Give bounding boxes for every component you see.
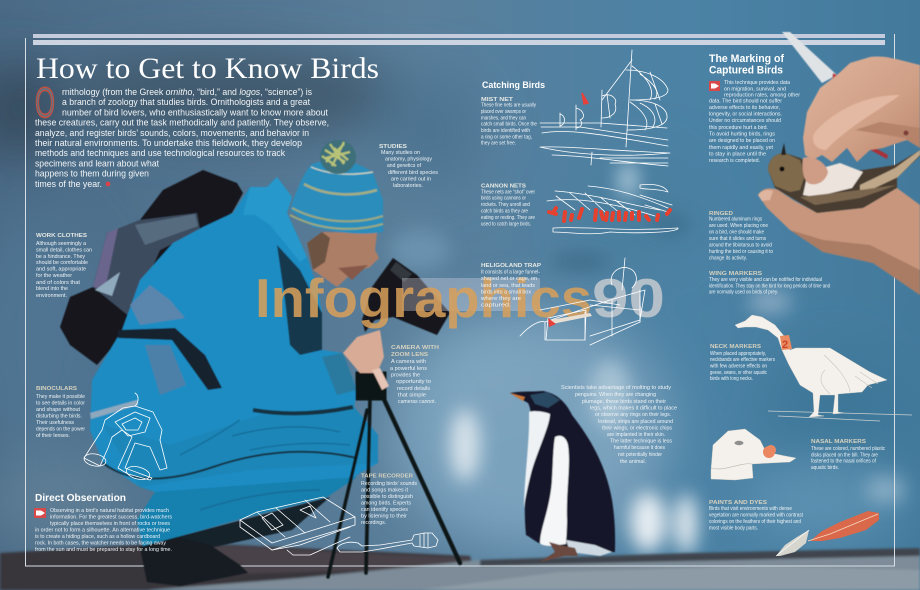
text: penguin note: not potentially hinder	[618, 452, 662, 458]
text: studies: different bird species	[388, 170, 439, 176]
text: mist net: they are set free.	[481, 140, 516, 146]
icon: cannon net sketch	[547, 184, 678, 234]
text: binoculars: depends on the power	[36, 426, 85, 432]
text: studies: Many studies on	[381, 150, 420, 156]
text: marking body: To avoid hurting birds, rings	[709, 132, 776, 138]
text: direct observation body: information. For the greatest success, bird-watchers	[50, 514, 173, 520]
intro text block	[35, 79, 329, 190]
text: tape recorder: possible to distinguish	[361, 494, 413, 500]
text: tape recorder: by listening to their	[361, 514, 407, 520]
icon: mist net sketch	[540, 50, 670, 166]
text: marking body: on migration, survival, and	[724, 86, 786, 92]
top double bar	[33, 34, 885, 45]
icon: painted feathers	[776, 511, 879, 556]
text: binoculars: They make it possible	[36, 394, 85, 400]
text: binoculars	[36, 386, 85, 439]
text: tape recorder	[361, 474, 418, 526]
text: neck markers	[710, 344, 775, 382]
text: work clothes: and soft, appropriate	[36, 266, 86, 272]
photo: penguin	[510, 391, 615, 562]
photo: hands holding bird	[758, 32, 920, 295]
text: camera with zoom lens	[390, 345, 439, 405]
text: wing markers: They are very visible and can be notified for individual	[709, 277, 822, 283]
text: binoculars: and shape without	[36, 407, 81, 413]
text: paints and dyes: Birds that visit environments with dense	[709, 506, 792, 512]
text: penguin note: The latter technique is less	[610, 438, 673, 444]
text: penguin note: Instead, strips are placed around	[598, 419, 673, 425]
panel: direct observation: Direct Observation	[35, 493, 126, 504]
text: ringed: sure that it slides and turns	[709, 236, 766, 242]
text: paints and dyes: vegetation are normally marked with contrast	[709, 512, 804, 518]
watermark: 90	[592, 267, 665, 329]
icon: heligoland trap sketch	[520, 258, 645, 345]
tripod	[328, 372, 460, 577]
text: camera with zoom lens: cameras cannot.	[398, 399, 436, 405]
text: cannon nets: birds using cannons or	[481, 196, 526, 202]
icon: tape recorder sketch	[240, 497, 355, 555]
text: marking body: research is completed.	[709, 158, 760, 164]
text: cannon nets: These nets are “shot” over	[481, 190, 535, 196]
text: binoculars: Their usefulness	[36, 420, 75, 426]
intro text block: analyze, and register birds’ sounds, colors, movements, and behavior in	[35, 128, 309, 139]
text: nasal markers: These are colored, numbered plastic	[811, 446, 885, 452]
pliers	[782, 32, 888, 159]
bird	[768, 143, 920, 213]
text: paints and dyes	[709, 500, 804, 532]
text: cannon nets	[481, 184, 535, 228]
text: penguin note: their wings, or electronic chips	[602, 426, 673, 432]
text: mist net: These fine nets are usually	[481, 103, 536, 109]
text: neck markers: NECK MARKERS	[710, 344, 761, 350]
text: neck markers: birds with long necks.	[710, 376, 753, 382]
text: studies: anatomy, physiology	[385, 156, 433, 162]
icon: arrow badge	[34, 508, 46, 518]
backpack	[60, 170, 243, 365]
text: marking body: are designed to be placed on	[709, 138, 775, 144]
text: direct observation body: rock. In both cases, the watcher needs to be facing away	[35, 540, 167, 546]
text: mist net	[481, 97, 537, 146]
text: ringed: Numbered aluminum rings	[709, 216, 762, 222]
text: penguin note: penguins. When they are changing	[575, 392, 656, 398]
panel: marking of captured birds	[709, 53, 784, 91]
text: ringed: are used. When placing one	[709, 223, 768, 229]
text: paints and dyes: most visible body parts.	[709, 526, 758, 532]
text: tape recorder: and songs makes it	[361, 488, 409, 494]
text: work clothes: environment.	[36, 293, 67, 299]
intro text block: number of bird lovers, who enthusiastically want to know more about	[62, 108, 328, 118]
text: paints and dyes: PAINTS AND DYES	[709, 500, 767, 506]
text: work clothes: small detail, clothes can	[36, 248, 92, 254]
text: penguin note: harmful because it does	[614, 445, 665, 451]
text: heligoland trap: captured.	[481, 302, 511, 308]
text: studies: and genetics of	[387, 163, 422, 169]
watermark: Infographics	[255, 267, 592, 329]
intro text block: rnithology (from the Greek ornitho, “bird,” and logos, “science”) is	[62, 87, 312, 98]
text: ringed	[709, 211, 773, 262]
text: cannon nets: used to catch large birds.	[481, 222, 531, 228]
intro text block: times of the year.	[35, 179, 102, 190]
intro text block: happens to them during given	[35, 168, 149, 180]
text: marking body: adverse effects to its behavior,	[709, 105, 780, 111]
text: work clothes: for the weather	[36, 273, 72, 279]
text: camera with zoom lens: provides the	[391, 372, 420, 378]
text: work clothes: WORK CLOTHES	[36, 233, 87, 239]
text: marking body: This technique provides data	[724, 80, 790, 86]
icon: goose with neck marker: 2	[782, 339, 788, 351]
text: wing markers: identification. They stay on the bird for long periods of time and	[709, 284, 830, 290]
intro text block: methods and techniques and use technological resources to track	[35, 148, 285, 159]
icon: microphone sketch	[337, 533, 438, 552]
intro text block: a branch of zoology that studies birds. Ornithologists and a great	[62, 97, 310, 108]
text: studies: STUDIES	[379, 144, 407, 150]
text: heligoland trap: birds into a small box	[481, 290, 532, 296]
text: nasal markers	[811, 439, 885, 471]
title: How to Get to Know Birds	[36, 52, 379, 85]
text: penguin note: are implanted in their skin.	[607, 432, 665, 438]
text: penguin note: plumage, these birds stand on their	[582, 399, 666, 405]
icon: duck head with nasal marker	[711, 429, 796, 480]
text: direct observation body: is to create a hiding place, such as a hollow cardboard	[35, 534, 160, 540]
panel: marking of captured birds: Captured Birds	[709, 64, 783, 76]
text: binoculars: BINOCULARS	[36, 386, 77, 392]
icon: binoculars sketch	[83, 393, 167, 482]
text: heligoland trap: where they are	[481, 296, 521, 302]
text: mist net: catch small birds. Once the	[481, 122, 537, 128]
text: neck markers: neckbands are effective markers	[710, 357, 775, 363]
text: binoculars: to see details in color	[36, 400, 85, 406]
intro text block: specimens and learn about what	[35, 158, 159, 170]
text: neck markers: with few adverse effects on	[710, 364, 767, 370]
text: marking body: data. The bird should not suffer	[709, 98, 782, 104]
text: wing markers: WING MARKERS	[709, 271, 762, 277]
text: marking body: longevity, or social interactions.	[709, 112, 782, 118]
jacket and trousers	[90, 177, 378, 548]
text: mist net: birds are identified with	[481, 128, 530, 134]
text: work clothes: blend into the	[36, 286, 68, 292]
text: work clothes: be a hindrance. They	[36, 254, 86, 260]
ground	[0, 544, 920, 590]
text: binoculars: of their lenses.	[36, 433, 70, 439]
panel: direct observation	[34, 493, 126, 518]
text: penguin note: or observe any rings on their legs.	[595, 412, 671, 418]
text: marking body: reproduction rates, among other	[724, 92, 800, 98]
text: marking body: Under no circumstances should	[709, 118, 781, 124]
text: work clothes	[36, 233, 92, 299]
text: ringed: around the tibiotarsus to avoid	[709, 242, 772, 248]
text: work clothes: and of colors that	[36, 280, 81, 286]
text: tape recorder: among birds. Experts	[361, 500, 412, 506]
heading: catching birds: Catching Birds	[482, 80, 545, 90]
intro text block: O	[35, 79, 55, 127]
text: penguin note: legs, which makes it difficult to place	[590, 406, 677, 412]
text: heligoland trap	[481, 263, 541, 308]
text: heligoland trap: HELIGOLAND TRAP	[481, 263, 541, 269]
text: camera with zoom lens: CAMERA WITH	[391, 345, 439, 351]
text: studies	[379, 144, 439, 189]
text: marking body	[709, 80, 800, 164]
text: camera with zoom lens: record details	[397, 386, 431, 392]
text: cannon nets: rockets. They unroll and	[481, 202, 530, 208]
text: direct observation body: in order not to form a silhouette. An alternative technique	[35, 528, 170, 534]
text: penguin note	[561, 385, 677, 465]
face	[307, 232, 379, 287]
text: cannon nets: catch birds as they are	[481, 208, 528, 214]
text: ringed: on a bird, one should make	[709, 230, 764, 236]
text: paints and dyes: colorings on the feathers of their highest and	[709, 519, 801, 525]
text: cannon nets: eating or resting. They are	[481, 215, 535, 221]
text: mist net: placed over swamps or	[481, 109, 526, 115]
text: studies: are carried out in	[391, 176, 431, 182]
text: tape recorder: TAPE RECORDER	[361, 474, 413, 480]
hands	[343, 330, 389, 390]
text: neck markers: geese, swans, or other aquatic	[710, 370, 767, 376]
text: marking body: to stay in place until the	[709, 152, 766, 158]
text: tape recorder: can identify species	[361, 507, 409, 513]
text: heligoland trap: shaped net or cage, on	[481, 276, 537, 282]
text: penguin note: Scientists take advantage of molting to study	[561, 385, 672, 391]
boot	[140, 537, 248, 586]
upper hand	[803, 57, 920, 184]
text: heligoland trap: It consists of a large funnel-	[481, 270, 540, 276]
text: camera with zoom lens: opportunity to	[396, 379, 431, 385]
icon: arrow badge	[709, 81, 720, 91]
text: wing markers: are normally used on birds of prey.	[709, 290, 778, 296]
text: nasal markers: fastened to the nasal orifices of	[811, 458, 877, 464]
text: binoculars: disturbing the birds.	[36, 414, 82, 420]
text: work clothes: should be comfortable	[36, 260, 88, 266]
text: heligoland trap: land or sea, that leads	[481, 283, 536, 289]
text: marking body: this procedure hurt a bird.	[709, 125, 768, 131]
camera	[362, 258, 450, 335]
text: nasal markers: aquatic birds.	[811, 465, 839, 471]
text: mist net: marshes, and they can	[481, 116, 526, 122]
text: mist net: a ring or some other tag,	[481, 134, 532, 140]
text: ringed: hurting the bird or causing it to	[709, 249, 773, 255]
text: direct observation body: from the sun and must be prepared to stay for a long time.	[35, 547, 172, 553]
text: mist net: MIST NET	[481, 97, 514, 103]
text: penguin note: the animal.	[620, 459, 646, 465]
text: work clothes: Although seemingly a	[36, 241, 86, 247]
text: cannon nets: CANNON NETS	[481, 184, 526, 190]
text: ringed: RINGED	[709, 211, 733, 217]
panel: marking of captured birds: The Marking of	[709, 53, 784, 65]
photo: ornithologist	[60, 140, 460, 586]
text: marking body: them rapidly and easily, yet	[709, 145, 774, 151]
text: direct observation body: Observing in a bird’s natural habitat provides much	[50, 508, 169, 514]
text: camera with zoom lens: that simple	[398, 392, 426, 398]
intro text block: these creatures, carry out the task methodically and patiently. They observe,	[35, 118, 329, 128]
text: direct observation body: typically place themselves in front of rocks or trees	[50, 521, 171, 527]
text: nasal markers: disks placed on the bill. They are	[811, 452, 878, 458]
text: direct observation body	[35, 508, 173, 553]
icon: goose with neck marker	[735, 315, 912, 421]
lower hand	[758, 188, 920, 295]
text: camera with zoom lens: ZOOM LENS	[391, 352, 428, 358]
text: camera with zoom lens: a powerful lens	[390, 366, 428, 372]
pompom	[320, 140, 356, 174]
text: nasal markers: NASAL MARKERS	[811, 439, 866, 445]
text: ringed: change its activity.	[709, 256, 747, 262]
text: studies: laboratories.	[393, 183, 423, 189]
text: tape recorder: Recording birds’ sounds	[361, 481, 418, 487]
text: wing markers	[709, 271, 830, 296]
hat	[290, 160, 383, 234]
intro text block: their natural environments. To undertake this fieldwork, they develop	[35, 138, 302, 149]
text: camera with zoom lens: A camera with	[391, 359, 426, 365]
text: tape recorder: recordings.	[361, 520, 386, 526]
text: neck markers: When placed appropriately,	[710, 351, 766, 357]
